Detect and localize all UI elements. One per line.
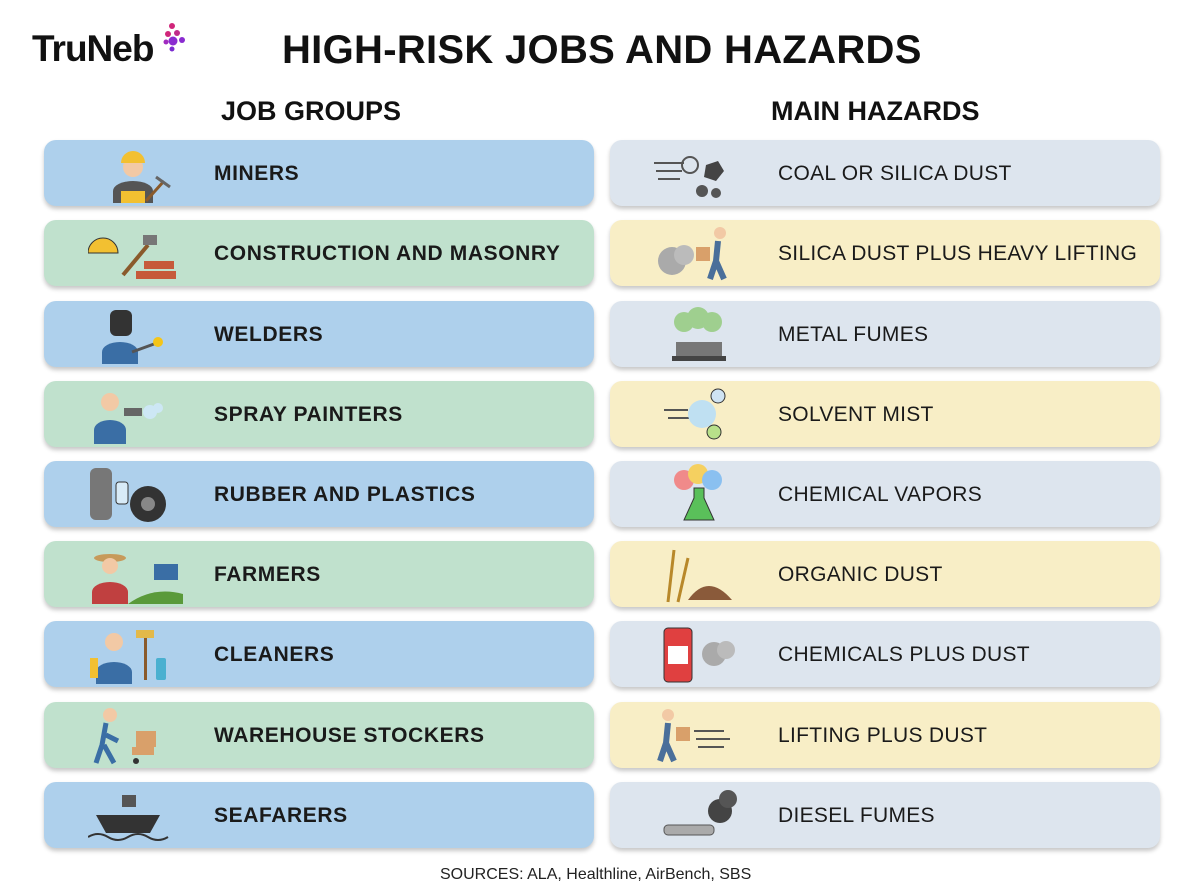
card: chemical vapors: [610, 461, 1160, 527]
card: lifting plus dust: LIFTING PLUS DUST: [778, 724, 987, 747]
card: construction: CONSTRUCTION AND MASONRY: [214, 242, 561, 265]
card: seafarers: SEAFARERS: [214, 804, 348, 827]
card: chemicals plus dust: [610, 621, 1160, 687]
card: silica dust plus heavy lifting: [610, 220, 1160, 286]
card: welders: WELDERS: [214, 323, 323, 346]
card: coal or silica dust: [610, 140, 1160, 206]
card: chemical vapors: CHEMICAL VAPORS: [778, 483, 982, 506]
title: HIGH-RISK JOBS AND HAZARDS: [282, 28, 922, 72]
card: rubber and plastics: RUBBER AND PLASTICS: [214, 483, 475, 506]
card: diesel fumes: [610, 782, 1160, 848]
card: organic dust: ORGANIC DUST: [778, 563, 943, 586]
card: farmers: FARMERS: [214, 563, 321, 586]
card: warehouse stockers: WAREHOUSE STOCKERS: [214, 724, 485, 747]
heading: main hazards: MAIN HAZARDS: [771, 96, 980, 126]
card: cleaners: [44, 621, 594, 687]
card: diesel fumes: DIESEL FUMES: [778, 804, 935, 827]
card: welders: [44, 301, 594, 367]
card: metal fumes: METAL FUMES: [778, 323, 928, 346]
card: rubber and plastics: [44, 461, 594, 527]
card: construction: [44, 220, 594, 286]
card: lifting plus dust: [610, 702, 1160, 768]
sources: SOURCES: ALA, Healthline, AirBench, SBS: [440, 866, 751, 883]
card: spray painters: SPRAY PAINTERS: [214, 403, 403, 426]
card: cleaners: CLEANERS: [214, 643, 334, 666]
card: warehouse stockers: [44, 702, 594, 768]
logo: TruNeb: [32, 28, 153, 69]
card: spray painters: [44, 381, 594, 447]
card: chemicals plus dust: CHEMICALS PLUS DUST: [778, 643, 1030, 666]
card: farmers: [44, 541, 594, 607]
card: solvent mist: [610, 381, 1160, 447]
card: miners: MINERS: [214, 162, 299, 185]
card: metal fumes: [610, 301, 1160, 367]
card: seafarers: [44, 782, 594, 848]
card: silica dust plus heavy lifting: SILICA DUST PLUS HEAVY LIFTING: [778, 242, 1137, 265]
heading: job groups: JOB GROUPS: [221, 96, 401, 126]
card: organic dust: [610, 541, 1160, 607]
card: miners: [44, 140, 594, 206]
card: solvent mist: SOLVENT MIST: [778, 403, 934, 426]
card: coal or silica dust: COAL OR SILICA DUST: [778, 162, 1012, 185]
